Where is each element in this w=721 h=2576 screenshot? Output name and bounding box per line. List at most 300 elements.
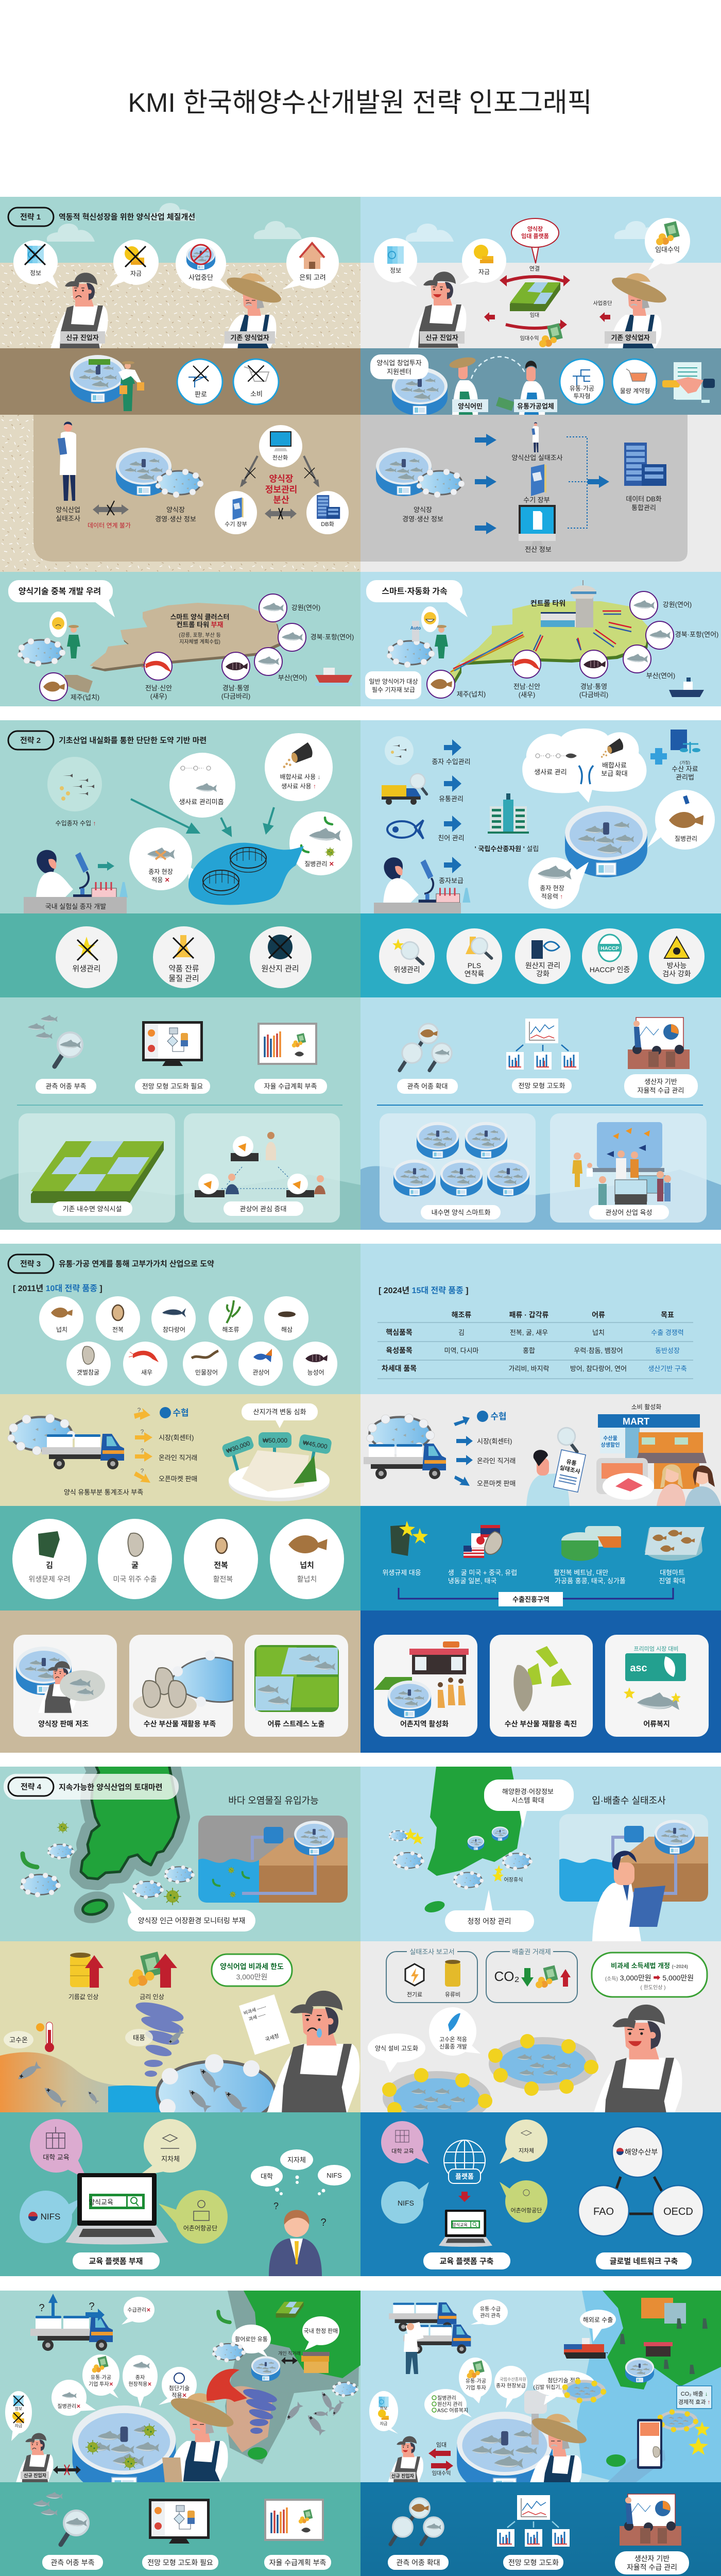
bubble: disease: 질병관리 ✕: [304, 860, 334, 868]
diagram: export zone bracket: [399, 1588, 673, 1606]
panel: scattered data left: [0, 415, 360, 572]
text: abalone exports: [554, 1569, 626, 1585]
bubble: retirement: 은퇴 고려: [299, 274, 326, 281]
bubble: retirement: [283, 237, 339, 290]
bubble: seed adaptability: 종자 현장: [540, 885, 564, 892]
icon: stars: [689, 2421, 710, 2455]
arrows: lease exchange: 임대: [436, 2442, 447, 2448]
icon: typhoon: [242, 2386, 278, 2434]
icon: globe platform: 플랫폼: [455, 2173, 474, 2180]
panel: integrated problem map: [0, 2291, 360, 2496]
text: question marks: ?: [138, 1406, 141, 1414]
box: tax limit: [212, 1954, 292, 1986]
heading: strategy 1 title: 역동적 혁신성장을 위한 양식산업 체질개선: [59, 213, 195, 222]
text: channels: 온라인 직거래: [477, 1457, 516, 1465]
bubble: tech overlap: 양식기술 중복 개발 우려: [19, 587, 101, 596]
circle: Jeonnam shrimp: 전남·신안: [513, 683, 540, 690]
circle: Jeonnam shrimp: 전남·신안: [145, 684, 172, 692]
bubble: fishing port agency: [159, 2190, 228, 2244]
pill: forecast model: 전망 모형 고도화 필요: [147, 2558, 213, 2567]
icons: dead fish: [16, 2028, 184, 2108]
table: species: 동반성장: [655, 1347, 680, 1354]
bubble: NIFS: [20, 2191, 83, 2243]
circle: hygiene: 위생관리: [72, 964, 101, 973]
diagram: export zone bracket: 수출진흥구역: [512, 1596, 550, 1603]
figure: fisher and processor: 유통가공업체: [517, 402, 554, 410]
circle: Gyeongbuk salmon: 경북·포항(연어): [675, 631, 718, 638]
card: low sales: 양식장 판매 저조: [38, 1720, 89, 1728]
circle: origin: [250, 926, 312, 988]
bubbles: thoughts: ?: [273, 2201, 279, 2211]
bubble: NIFS: NIFS: [398, 2199, 414, 2207]
panel: 2011 species: [0, 1244, 360, 1394]
box: tax reform: ( 한도인상 ): [640, 1985, 666, 1991]
diagram: lease exchange: [484, 265, 612, 347]
pill: producer supply: 자율적 수급 관리: [627, 2563, 677, 2571]
figure: existing farmer: [605, 273, 669, 350]
diagram: network triangle: OECD: [663, 2206, 693, 2217]
species: tuna: 참다랑어: [163, 1326, 185, 1333]
circle: Jeonnam shrimp: (새우): [150, 692, 167, 700]
table: species: 수출 경쟁력: [651, 1329, 684, 1336]
icon: tax notice: [239, 1994, 290, 2055]
species: eel: 민물장어: [195, 1369, 218, 1376]
bubble: advanced tech: [159, 2367, 197, 2405]
table: species: 어류: [592, 1311, 605, 1319]
circle: volume contract: 물량 계약형: [620, 387, 650, 395]
circle: origin: 원산지 관리: [261, 964, 299, 973]
figure: new entrant: 신규 진입자: [391, 2473, 415, 2479]
icon: pond, auto feeder, farmer, happy emoji: [387, 606, 448, 668]
icon: pond, farmer and sad emoji: [18, 612, 80, 667]
icon: fish tray: [645, 1527, 705, 1561]
bubble: fishing port agency: [500, 2180, 547, 2223]
bubble: local government: 지차체: [519, 2147, 534, 2154]
arrows: lease exchange: [428, 2442, 453, 2477]
pill: producer supply: 자율적 수급 관리: [638, 1087, 684, 1094]
label: Suhyup: 수협: [490, 1412, 507, 1421]
text: channels: 시장(회센터): [159, 1434, 194, 1442]
icon: scientist lab: [383, 857, 470, 903]
icon: supply plan frame: [259, 1024, 316, 1064]
circle: radiation: 검사 강화: [662, 970, 691, 978]
panel: monitoring band left: [0, 2482, 360, 2576]
bubble: seed distribution: 국립수산종자원: [500, 2377, 526, 2382]
card: ornamental fish interest: 관상어 관심 증대: [240, 1205, 286, 1213]
icon: three magnifiers: [400, 1024, 452, 1071]
pill: supply plan: [264, 2555, 331, 2570]
pill: forecast model: [142, 2555, 218, 2570]
icons: ponds, tanks, stars: [389, 1826, 533, 1890]
panel: education and global network: [360, 2112, 721, 2276]
icon: red ship: [315, 668, 352, 686]
pill: expand species: 관측 어종 확대: [407, 1082, 448, 1090]
text: farm info: 경영·생산 정보: [155, 515, 196, 523]
icon: tank and pond: [376, 448, 465, 498]
circle: drug residue: 물질 관리: [168, 974, 199, 983]
text: control tower: 컨트롤 타워: [530, 599, 565, 607]
icon: chart inputs: [497, 2495, 570, 2547]
icon: oil price: [68, 1953, 104, 2001]
arrow: ledger DB gap: [265, 508, 297, 519]
icon: sick tank: [73, 2405, 176, 2496]
icon: plus: [650, 748, 667, 765]
icon: sashimi plate with prices: [221, 1432, 332, 1501]
panel: monitoring band right: [360, 2482, 721, 2576]
pill: producer supply: [615, 2551, 689, 2574]
heading: strategy 4 bar: [4, 1774, 179, 1800]
icons: yellow float ponds: [382, 2034, 598, 2130]
panel: safety band right: [360, 913, 721, 997]
species: abalone: 전복: [112, 1326, 124, 1333]
icons: field and bacteria: [218, 2302, 304, 2323]
map: Korea with pollution halo: [71, 1762, 179, 1927]
icon: truck inspection: [382, 772, 433, 805]
icon: globe platform: [444, 2140, 485, 2202]
bubble: info funds: 정보: [15, 2406, 22, 2411]
text: cluster absence: 컨트롤 타워 부재: [177, 621, 223, 629]
bubble: funds: [459, 239, 506, 284]
bubble: live fish only: [232, 2325, 271, 2357]
circle: consumption: 소비: [250, 390, 263, 398]
pill: supply plan: 자율 수급계획 부족: [269, 2558, 327, 2567]
table: species: 목표: [661, 1311, 674, 1319]
table: species: 핵심품목: [386, 1328, 413, 1336]
map: Korea clean: [423, 1762, 522, 1914]
card: abalone: 전복: [214, 1561, 228, 1570]
icon: computer: [519, 505, 556, 547]
pill: platform absent: 교육 플랫폼 부재: [89, 2257, 143, 2266]
circle: PLS: PLS: [468, 961, 481, 970]
bubbles: thoughts: NIFS: [327, 2172, 342, 2179]
bubble: domestic only: 국내 한정 판매: [304, 2328, 338, 2334]
label: domestic lab: [24, 897, 127, 913]
bubble: business stopped: [176, 239, 232, 291]
icon: three magnifiers: [390, 2498, 443, 2545]
bubble: disease, origin, ASC: [424, 2389, 472, 2420]
panel: key items left: [0, 1506, 360, 1611]
bubble: disease mgmt: [647, 790, 715, 850]
text: oyster exports: [448, 1569, 517, 1585]
text: survey: 양식산업 실태조사: [511, 454, 563, 462]
bubble: local government: 지차체: [161, 2155, 180, 2163]
bubble: essential equipment: 일반 양식어가 대상: [369, 678, 418, 685]
text: ledger: 수기 장부: [523, 496, 550, 504]
icon: big tank: [565, 806, 647, 877]
figure: new entrant: [16, 2433, 53, 2482]
circle: origin strengthen: 원산지 관리: [525, 961, 560, 970]
icon: red wave: [207, 2369, 247, 2402]
panel: cost pressure left: [0, 1941, 360, 2125]
circle: hygiene: [379, 928, 435, 984]
pill: build platform: 교육 플랫폼 구축: [440, 2257, 494, 2266]
bubble: funds: 자금: [130, 270, 142, 277]
heading: 2024 species: [ 2024년 15대 전략 품종 ]: [379, 1286, 469, 1295]
bubble: seed distribution: 종자 현장보급: [496, 2383, 526, 2389]
icon: servers: [624, 443, 666, 486]
icon: heat: [4, 2022, 54, 2052]
panel: map left no control tower: [0, 572, 360, 706]
icons: store, ponds, people: [562, 2298, 708, 2432]
bubble: advanced technology: 첨단기술 적용: [547, 2377, 580, 2384]
text: large mart: 대형마트: [660, 1569, 684, 1577]
bubble: clean fishery: 청정 어장 관리: [467, 1917, 511, 1925]
bubbles: thoughts: ?: [320, 2217, 327, 2228]
icon: sea cages: [188, 843, 304, 905]
circle: Gyeongnam grouper: (다금바리): [579, 691, 608, 699]
bubble: local government: [500, 2120, 547, 2164]
bubble: info: [13, 240, 58, 289]
card: low sales: [13, 1635, 117, 1737]
text: channels: 온라인 직거래: [159, 1454, 197, 1462]
species: oyster: [66, 1342, 111, 1386]
panel: 2024 species table: [360, 1244, 721, 1394]
lines: dotted data links: [566, 437, 587, 528]
text: channels: 오픈마켓 판매: [159, 1475, 197, 1483]
bubble: feed management cloud: [522, 728, 646, 803]
icon: fisheries law: 관리법: [676, 773, 694, 781]
bubble: disease: [278, 811, 352, 875]
figure: old farmer: [527, 2413, 589, 2490]
box: tax limit: 3,000만원: [236, 1973, 267, 1981]
bubble: local government: [138, 2119, 196, 2176]
icon: meeting: [628, 1018, 690, 1069]
arrow: to seed: [98, 861, 114, 871]
bubble: distribution mgmt: 유통·수급: [480, 2306, 501, 2312]
circle: radiation: 방사능: [667, 961, 686, 970]
bubble: smart automation: 스마트·자동화 가속: [382, 587, 448, 596]
text: cluster absence: (강릉, 포항, 부산 등: [179, 632, 221, 638]
icon: interest rate: [129, 1952, 177, 2001]
text: large mart: [659, 1569, 685, 1585]
figure: worried farmer: [267, 1991, 359, 2114]
heading: strategy 3 badge: 전략 3: [20, 1260, 41, 1268]
circle: Gyeongnam grouper: 경남·통영: [580, 683, 607, 690]
icon: dead fish pond: [157, 2054, 276, 2125]
circle: Gyeongbuk salmon: 경북·포항(연어): [311, 633, 354, 641]
text: abalone exports: 활전복 베트남, 대만: [554, 1569, 608, 1577]
bubble: raw feed: [169, 753, 235, 818]
pill: self supply plan: [254, 1079, 327, 1094]
pill: expand species: [388, 2555, 449, 2570]
text: question marks: ?: [141, 1467, 144, 1475]
table: species: 육성품목: [386, 1346, 413, 1354]
pill: platform absent: [73, 2252, 160, 2269]
icon: broodstock fish: [387, 820, 423, 839]
figure: surveyor: [58, 421, 76, 501]
bubble: info funds: [369, 2391, 398, 2434]
text: channels: 시장(회센터): [477, 1437, 512, 1445]
arrows: flows to regions: [451, 611, 631, 672]
heading: strategy 3 title: 유통·가공 연계를 통해 고부가가치 산업으로 도약: [59, 1260, 214, 1268]
box: CO2 effect: 경제적 효과 ↑: [678, 2399, 710, 2405]
bubble: export abroad: 해외로 수출: [583, 2316, 613, 2324]
heading: strategy 1 badge: [8, 208, 54, 226]
panel: monitoring right: [360, 1762, 721, 1941]
circle: Jeju flatfish: [40, 673, 99, 701]
bubble: distribution mgmt: [471, 2299, 508, 2325]
icon: sashimi plate with prices: ₩30,000: [225, 1439, 251, 1455]
table: species: 우럭·참돔, 뱀장어: [574, 1347, 623, 1354]
species: sea cucumber: 해삼: [281, 1326, 293, 1333]
text: scattered info warning: 양식장: [269, 474, 294, 484]
bubble: supply management: [122, 2297, 154, 2325]
bubble: info system: 시스템 확대: [511, 1797, 544, 1804]
table: species: 패류 · 갑각류: [509, 1311, 549, 1319]
figure: new entrant: [409, 272, 467, 348]
circle: investment type: 유통·가공: [570, 385, 594, 392]
bubble: NIFS: [381, 2181, 429, 2224]
icon: contract handshake: [662, 362, 715, 403]
bubble: seed adaptation: 종자 현장: [148, 868, 173, 875]
card: seaweed: 김: [46, 1561, 53, 1570]
text: oyster exports: 생 굴 미국 + 중국, 유럽: [448, 1569, 517, 1577]
icon: sashimi plate with prices: ₩45,000: [302, 1439, 328, 1450]
bubble: price fluctuation: [242, 1403, 318, 1428]
bubble: funds: 자금: [478, 268, 490, 276]
heading: strategy 4 bar: 전략 4: [21, 1783, 42, 1791]
text: survey: 양식산업: [56, 506, 80, 514]
strategy 2 block: [0, 720, 721, 1230]
icon: mart: MART: [623, 1416, 649, 1427]
circle: consumption: [233, 359, 279, 404]
bubble: investment: 기업 투자✕: [89, 2381, 113, 2387]
bubbles: thoughts: 지자체: [287, 2156, 306, 2164]
circle: drug residue: 약품 잔류: [168, 964, 199, 973]
box: tax reform: 비과세 소득세법 개정 (~2024): [611, 1962, 688, 1970]
bubble: advanced tech: 첨단기술: [169, 2385, 190, 2392]
bubble: seed adaptation: 적응 ✕: [151, 876, 170, 884]
bubble: lease platform: [511, 218, 559, 263]
icon: navy ship: [669, 677, 704, 697]
bubble: disease: [52, 2380, 96, 2416]
text: management items: 종자 수입관리: [432, 758, 471, 766]
diagram: network triangle: FAO: [593, 2206, 614, 2217]
bubble: disease, origin, ASC: 원산지 관리: [437, 2401, 462, 2408]
icon: seeds: [385, 736, 414, 765]
text: integrated DB: 데이터 DB화: [626, 495, 662, 503]
icon: oil price: 기름값 인상: [68, 1993, 98, 2001]
text: cluster absence: [170, 613, 229, 645]
bubble: investment: 유통·가공: [466, 2378, 486, 2384]
icon: small laptop: [439, 2210, 492, 2247]
card: fish welfare: asc: [630, 1663, 647, 1674]
icon: raw feed and compound feed: [534, 738, 628, 784]
bubble: info system: [484, 1780, 574, 1828]
label: typhoon: 태풍: [133, 2034, 145, 2042]
icon: supply frame: [265, 2500, 323, 2540]
pill: forecast model: 전망 모형 고도화 필요: [142, 1082, 203, 1090]
text: question marks: ?: [141, 1447, 144, 1454]
arrows: management items: [444, 739, 461, 873]
diagram: network triangle: [578, 2127, 703, 2236]
map: coast: [577, 2291, 721, 2482]
text: large mart: 진열 확대: [659, 1577, 685, 1585]
text: farm info: 양식장: [414, 506, 432, 514]
figure: researcher: [592, 1851, 665, 1941]
bubble: university: 대학 교육: [391, 2148, 414, 2155]
pill: build platform: [423, 2252, 510, 2269]
label: Suhyup: [160, 1407, 189, 1418]
icon: sashimi plate with prices: ₩50,000: [263, 1437, 287, 1444]
figure: new entrant: 신규 진입자: [24, 2472, 47, 2478]
pill: upgraded model: [503, 2555, 563, 2570]
table: species: 전복, 굴, 새우: [510, 1329, 548, 1336]
icon: flags and oyster: [464, 1525, 506, 1558]
bubble: heat resistant breed: 신품종 개발: [439, 2043, 467, 2050]
panel: monitoring left: [0, 1762, 360, 1941]
icon: raw feed and compound feed: 배합사료: [602, 761, 627, 769]
bubble: domestic only: [302, 2316, 339, 2350]
bubble: seed adaptability: [528, 857, 589, 909]
text: integrated DB: [626, 495, 662, 512]
icon: seaweed star: [390, 1521, 428, 1556]
bubble: lease platform: 임대 플랫폼: [521, 232, 549, 240]
circle: origin strengthen: [515, 928, 571, 984]
icon: monitor: [142, 1021, 203, 1066]
circle: Busan salmon: 부산(연어): [646, 672, 675, 680]
table: lab bench: [374, 903, 461, 913]
box: emissions trading: 배출권 거래제: [512, 1948, 551, 1956]
diagram: lease exchange: 임대: [530, 312, 539, 318]
table: species: 방어, 참다랑어, 연어: [570, 1365, 627, 1372]
card: byproduct recycling: [490, 1635, 593, 1737]
bubble: lease platform: 양식장: [527, 226, 543, 232]
box: tax reform: [592, 1953, 707, 1997]
diagram: lease exchange: 임대수익: [520, 335, 539, 342]
species: seaweed: 해조류: [222, 1326, 239, 1333]
panel: blue band investment center: [360, 348, 721, 416]
icon: fisheries law: (가칭): [680, 760, 690, 765]
bubble: business stopped: 사업중단: [188, 274, 213, 281]
pill: upgraded model: [512, 1078, 572, 1093]
species: flatfish: [39, 1296, 83, 1341]
text: effluent survey: 입·배출수 실태조사: [592, 1795, 666, 1806]
card: oyster: [98, 1519, 172, 1599]
circle: volume contract: [612, 359, 657, 404]
circle: investment type: [560, 359, 604, 404]
circle: radiation: [649, 928, 705, 984]
card: ornamental industry: 관상어 산업 육성: [606, 1209, 652, 1216]
label: Suhyup: [477, 1411, 507, 1422]
circle: Busan salmon: [623, 645, 675, 680]
circle: PLS: [447, 928, 502, 984]
card: byproduct shortage: [129, 1635, 233, 1737]
text: farm info: 경영·생산 정보: [402, 515, 443, 523]
arrows: uncertain channels: [134, 1408, 152, 1483]
circle: Jeju flatfish: 제주(넙치): [71, 693, 99, 701]
box: tax limit: 양식어업 비과세 한도: [220, 1962, 284, 1971]
bubble: info: [374, 238, 417, 286]
table: species: [377, 1311, 693, 1379]
bubble: seed distribution: [494, 2366, 527, 2409]
text: channels: 오픈마켓 판매: [477, 1480, 516, 1487]
bubble: investment: 유통·가공: [91, 2375, 111, 2381]
bubble: seed adaptability: 적응력 ↑: [541, 893, 563, 900]
circle: Gyeongnam grouper: [579, 650, 608, 699]
icon: monitor: [149, 2499, 210, 2544]
icon: tax notice: 국세청: [264, 2032, 280, 2043]
icons: trucks and inspector: [389, 2302, 471, 2374]
bubbles: thoughts: 대학: [261, 2173, 273, 2180]
text: management items: 친어 관리: [438, 834, 465, 842]
circle: origin strengthen: 강화: [536, 970, 550, 978]
table: species: 미역, 다시마: [444, 1347, 479, 1354]
species: guppy: 관상어: [252, 1369, 270, 1376]
bubble: startup support center: 지원센터: [387, 368, 411, 376]
bubble: advanced technology: [533, 2370, 595, 2405]
text: survey: [56, 506, 80, 522]
